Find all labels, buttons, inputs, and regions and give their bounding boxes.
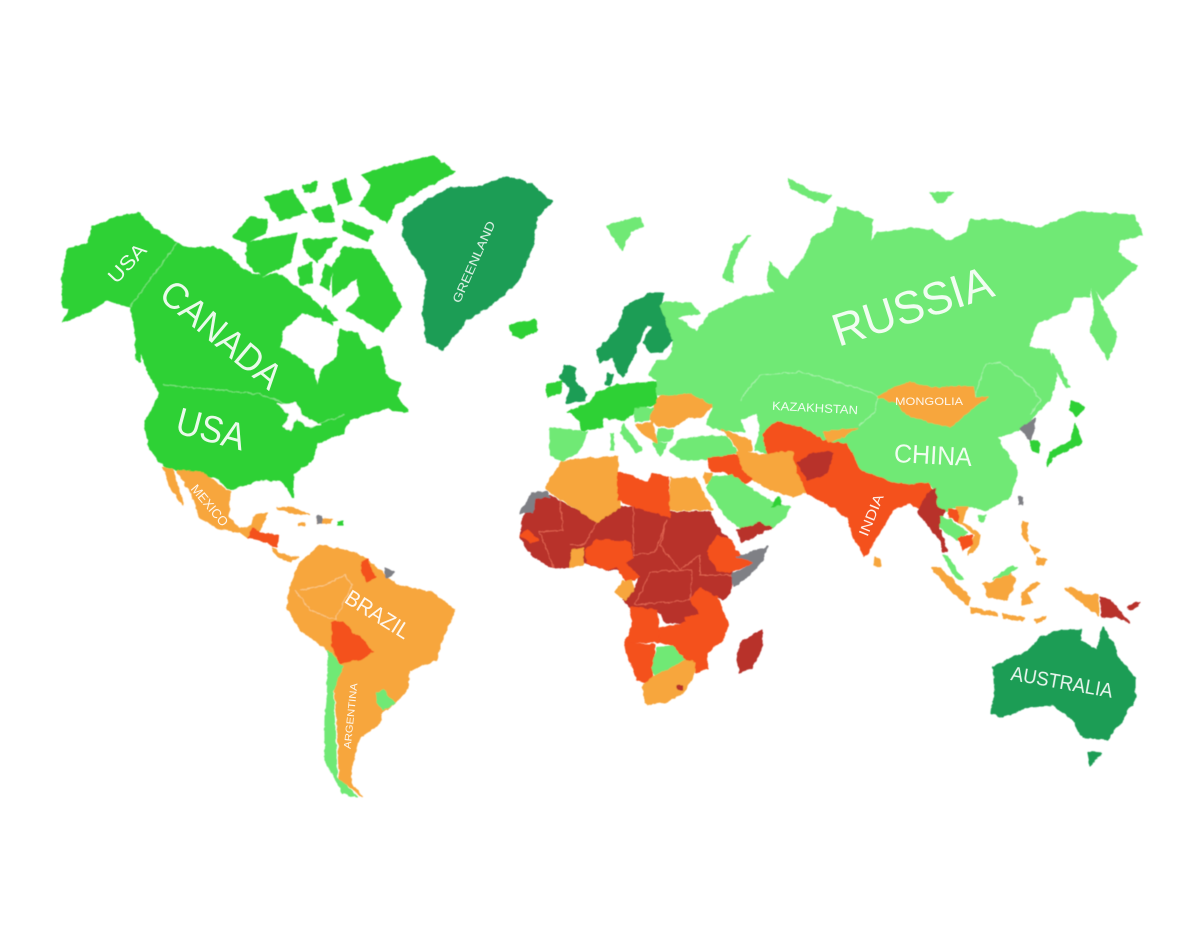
label: China: CHINA <box>893 438 973 472</box>
region: Europe <box>547 293 713 461</box>
region: Southeast Asia and Pacific islands <box>932 497 1140 623</box>
country: Mongolia <box>878 382 988 427</box>
region: Russia, Central and East Asia (light green) <box>607 178 1143 522</box>
country: Greenland <box>403 177 552 350</box>
label: Argentina: ARGENTINA <box>343 682 360 749</box>
label: Kazakhstan: KAZAKHSTAN <box>772 399 858 417</box>
label: Canada: CANADA <box>152 272 291 397</box>
label: Australia: AUSTRALIA <box>1009 663 1115 703</box>
region: North America <box>62 156 455 497</box>
country: Australia <box>992 627 1135 765</box>
label: Mongolia: MONGOLIA <box>895 396 964 408</box>
label: USA: USA <box>171 401 251 459</box>
label: Russia: RUSSIA <box>825 255 1000 356</box>
country: Iceland <box>510 320 538 338</box>
region: Middle East and South Asia <box>705 422 945 566</box>
region: Central America and Caribbean <box>163 468 343 562</box>
Great Lakes <box>278 403 320 430</box>
label: Alaska USA: USA <box>104 239 152 288</box>
region: Japan and Korea <box>1020 400 1085 467</box>
region: South America <box>287 545 455 797</box>
country labels <box>104 219 1115 749</box>
label: Mexico: MEXICO <box>188 481 231 529</box>
label: India: INDIA <box>855 491 887 538</box>
label: Greenland: GREENLAND <box>450 219 498 305</box>
label: Brazil: BRAZIL <box>341 585 415 644</box>
map shapes <box>62 156 1143 797</box>
region: Africa <box>520 457 767 705</box>
